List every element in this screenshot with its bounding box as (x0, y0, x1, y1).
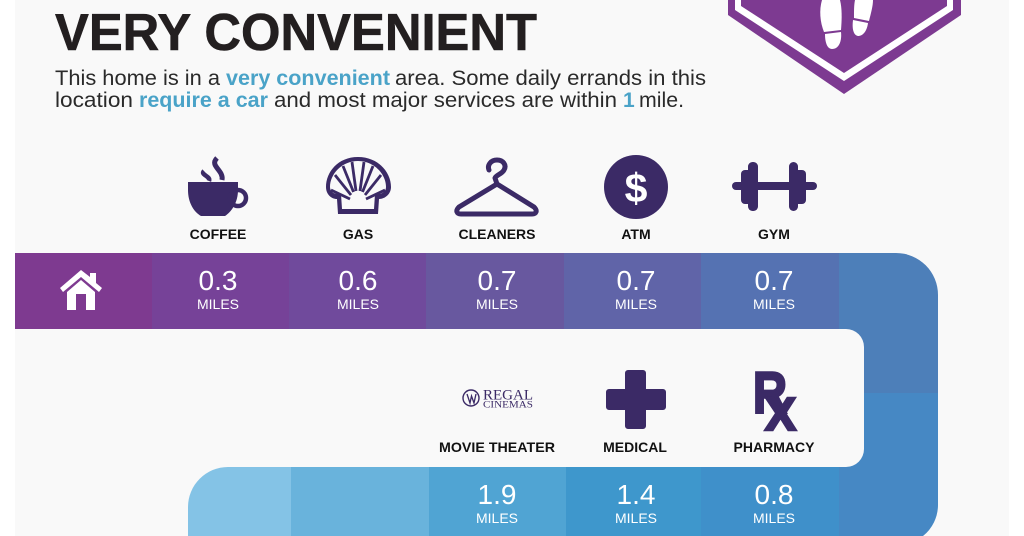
top row distances: MILES (337, 296, 379, 312)
description text block: require a car (139, 89, 268, 112)
description text block: and most major services are within (274, 89, 617, 112)
icon: hanger (457, 160, 536, 214)
top row distances: MILES (615, 296, 657, 312)
label: pharmacy: PHARMACY (734, 439, 815, 455)
description text block: location (55, 89, 133, 112)
badge: walking footprints shield (728, 0, 961, 94)
icon: atm (604, 155, 668, 219)
icon: gym dumbbell (732, 162, 817, 211)
bottom row distances: MILES (615, 510, 657, 526)
top row distances: MILES (476, 296, 518, 312)
icon: home (60, 270, 102, 310)
icon: pharmacy rx: X (765, 388, 796, 440)
top row distances (197, 265, 795, 312)
bottom row distances: 1.4 (617, 479, 655, 510)
icon: regal cinemas logo (463, 388, 533, 410)
bottom row distances (476, 479, 795, 526)
icon: regal cinemas logo: REGAL (483, 388, 533, 404)
description text block: area. Some daily errands in this (395, 67, 706, 90)
label: movie theater: MOVIE THEATER (439, 439, 555, 455)
bottom row distances: 0.8 (755, 479, 793, 510)
top row distances: MILES (753, 296, 795, 312)
bottom row distances: MILES (753, 510, 795, 526)
title: VERY CONVENIENT (55, 4, 537, 62)
top row distances: 0.7 (755, 265, 793, 296)
label: gas: GAS (343, 226, 373, 242)
label: gym: GYM (758, 226, 790, 242)
icon: coffee (188, 158, 246, 216)
bottom row distances: 1.9 (478, 479, 516, 510)
description text block: mile. (639, 89, 684, 112)
description text block (55, 67, 706, 112)
description text block: 1 (623, 89, 635, 112)
top row distances: 0.3 (199, 265, 237, 296)
label: cleaners: CLEANERS (458, 226, 536, 242)
label: medical: MEDICAL (603, 439, 667, 455)
top row distances: MILES (197, 296, 239, 312)
description text block: This home is in a (55, 67, 220, 90)
icon: pharmacy rx: R (753, 361, 787, 426)
top row distances: 0.6 (339, 265, 377, 296)
bottom row distances: MILES (476, 510, 518, 526)
icon: atm: $ (625, 165, 648, 211)
icon: gas shell (326, 157, 391, 214)
label: coffee: COFFEE (190, 226, 246, 242)
icon: regal cinemas logo: CINEMAS (483, 400, 533, 410)
top row distances: 0.7 (617, 265, 655, 296)
route band: bottom row (188, 393, 938, 536)
description text block: very convenient (226, 67, 390, 90)
label: atm: ATM (621, 226, 651, 242)
top row distances: 0.7 (478, 265, 516, 296)
icon: medical cross (606, 370, 666, 429)
route band: top row to gym (15, 253, 938, 393)
